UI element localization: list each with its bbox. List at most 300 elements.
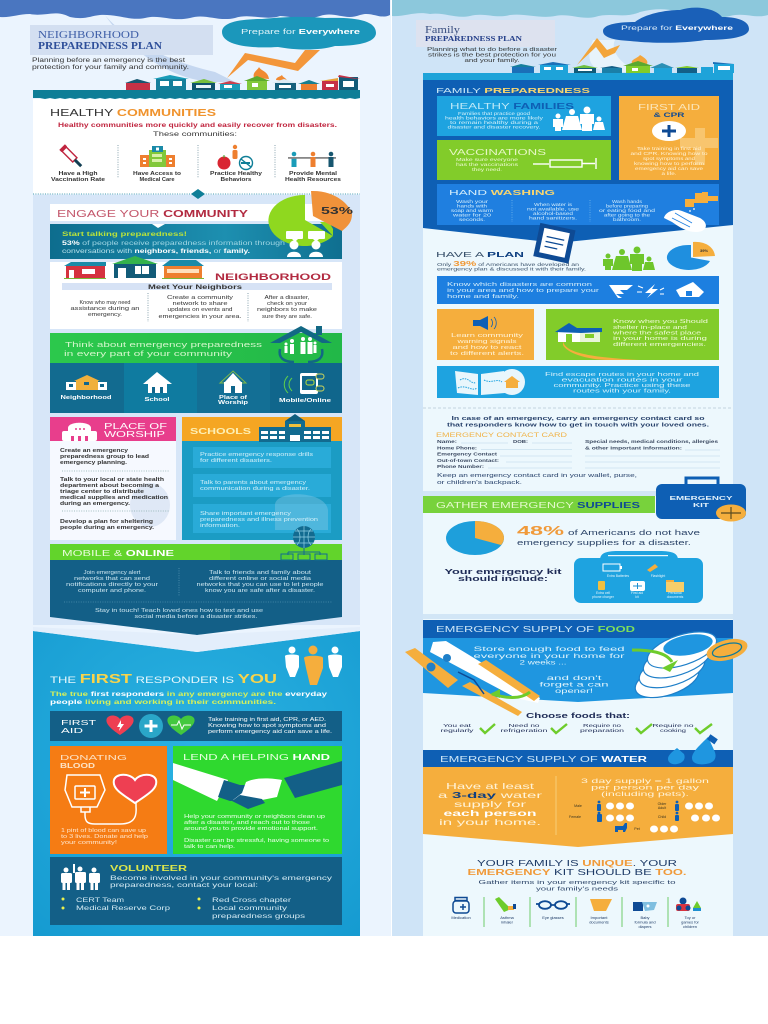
heading: first aid: FIRST	[61, 718, 97, 727]
text: worship tips: emergency planning.	[60, 460, 128, 466]
heading: your family is unique: YOUR FAMILY IS UNIQUE . YOUR	[477, 859, 678, 868]
panel: hand washing: Wash hands	[612, 199, 643, 204]
icon: emergency kit: EMERGENCY	[670, 496, 733, 502]
intro text	[32, 57, 189, 71]
form fields: Home Phone:	[437, 446, 478, 450]
panel: know which disasters: home and family.	[447, 294, 520, 300]
list: volunteer organizations	[62, 897, 305, 920]
panel: gather emergency supplies	[423, 478, 746, 603]
heading: lend a helping hand: LEND A HELPING HAND	[183, 752, 330, 762]
panel: shelter in place: shelter in-place and	[613, 325, 687, 331]
heading: donating blood: BLOOD	[60, 761, 96, 770]
panel: shelter in place	[546, 309, 719, 360]
title: family preparedness plan	[416, 20, 555, 47]
panel: healthy communities	[33, 99, 360, 194]
panel: family preparedness plan background	[392, 0, 768, 936]
text: your emergency kit should include: Your emergency kit	[444, 569, 563, 576]
text: item labels: Toy or	[685, 915, 696, 920]
text: item labels: Medication	[451, 915, 471, 920]
text: helping hand advice: Disaster can be stressful, having someone to	[184, 838, 329, 844]
text: item labels: documents	[589, 920, 609, 924]
icon: school building	[259, 414, 331, 442]
panel: engage your community	[50, 191, 354, 635]
text: volunteer intro: preparedness, contact your local:	[110, 882, 258, 889]
panel: first aid and cpr	[619, 96, 719, 180]
icon: can opener	[405, 641, 540, 716]
chart: water per person: Female	[569, 815, 581, 819]
panel: escape routes	[437, 366, 719, 398]
text: worship tips	[60, 448, 170, 531]
list: food criteria: Require no	[652, 723, 694, 729]
text: store enough food: forget a can	[540, 682, 609, 688]
text: school tips: Talk to parents about emergency	[200, 480, 306, 486]
panel: hand washing: seconds.	[459, 217, 485, 222]
text: icon labels	[51, 171, 341, 183]
panel: hand washing: not available, use	[527, 206, 580, 212]
text: neighbor tips: After a disaster,	[264, 295, 310, 301]
text: one gallon per person: (including pets).	[601, 792, 690, 798]
intro text: protection for your family and community.	[32, 64, 189, 71]
panel: vaccinations	[437, 140, 611, 180]
icon: house and path	[555, 323, 640, 360]
panel: lend a helping hand	[173, 746, 342, 854]
panel: emergency supply of food	[405, 620, 750, 734]
callout: prepare for everywhere cloud	[603, 8, 749, 43]
panel: donating blood	[50, 746, 167, 854]
text: think about emergency preparedness: in every part of your community	[64, 349, 232, 358]
icon: kit contents: Extra cell	[596, 591, 610, 595]
heading: the first responder is you: THE FIRST RESPONDER IS YOU	[50, 672, 277, 686]
text: neighbor tips: assistance during an	[70, 306, 140, 312]
icon: green family	[603, 246, 655, 271]
panel: hand washing: hands with	[457, 204, 488, 208]
text: school tips: information.	[200, 523, 240, 529]
form fields: Phone Number:	[437, 464, 485, 469]
panel: hand washing: bathroom.	[613, 217, 641, 222]
panel: healthy families: health behaviors are more likely	[445, 116, 544, 120]
panel: shelter in place: where the safest place	[613, 330, 701, 336]
icon: volunteers	[61, 864, 100, 890]
panel: warning signals: warning signals	[456, 339, 517, 345]
text: labels	[60, 395, 331, 406]
panel: first aid and cpr: spot symptoms and	[643, 156, 696, 161]
panel: shelter in place: different emergencies.	[613, 342, 706, 348]
icon: place of worship	[220, 371, 246, 393]
panel: shelter in place: in your home is during	[613, 336, 707, 342]
icon: school	[143, 372, 172, 393]
text: 48 percent fact: 48%	[517, 523, 565, 538]
icon: healthy behaviors	[218, 145, 252, 170]
text: helping hand advice	[184, 814, 329, 850]
text: neighbor tips: emergency.	[88, 312, 122, 318]
text: gather items: your family's needs	[536, 886, 618, 892]
text: 48 percent fact	[517, 523, 700, 547]
text: healthy communities summary: Healthy communities more quickly and easily recover from disasters.	[58, 122, 337, 129]
text: store enough food	[474, 646, 626, 695]
text: blood facts: to 3 lives. Donate and help	[61, 834, 148, 840]
form fields: Name:	[437, 439, 458, 444]
text: mobile tips: know you are safe after a disaster.	[205, 588, 315, 594]
text: icon labels: Vaccination Rate	[51, 177, 105, 183]
text: neighbor tips: neighbors to make	[257, 307, 317, 313]
heading: place of worship: WORSHIP	[104, 430, 165, 439]
chart: water per person: Male	[574, 804, 582, 808]
panel: shelter in place: Know when you Should	[613, 319, 708, 325]
icon: toy	[676, 898, 701, 911]
icon: row of houses	[125, 67, 360, 90]
list: food criteria	[440, 723, 712, 734]
text: one gallon per person	[581, 779, 709, 798]
panel: emergency contact card	[436, 416, 720, 486]
icon: kit contents	[574, 551, 703, 603]
icon: emergency kit	[656, 478, 746, 522]
panel: warning signals: Learn community	[451, 333, 524, 339]
icon: eye glasses	[536, 901, 570, 909]
text: one gallon per person: per person per day	[591, 786, 699, 792]
text: labels: Mobile/Online	[279, 398, 331, 404]
text: neighbor tips: Create a community	[167, 295, 234, 301]
panel: hand washing: before preparing	[606, 204, 649, 208]
text: gather items	[478, 880, 676, 892]
panel: first aid and cpr: FIRST AID	[638, 102, 700, 112]
chart: 53% pie: 53%	[321, 205, 354, 217]
list: food criteria: Need no	[508, 723, 540, 729]
text: school tips: for different disasters.	[200, 458, 272, 464]
panel: start talking	[50, 224, 342, 259]
text: labels: Worship	[218, 400, 249, 406]
icon: mobile online	[284, 373, 324, 394]
text: worship tips: Create an emergency	[60, 448, 128, 454]
icon: kit contents: Extra Batteries	[607, 574, 629, 578]
icon: watermark hands	[130, 483, 170, 527]
text: three day water supply: in your home.	[439, 817, 541, 827]
panel: escape routes: evacuation routes in your	[562, 378, 683, 384]
panel: healthy families: Families that practice good	[458, 111, 531, 116]
icon: family	[553, 106, 605, 131]
heading: have a plan: HAVE A PLAN	[436, 250, 524, 259]
panel: family preparedness	[423, 73, 733, 243]
text: choose foods that: Choose foods that:	[526, 711, 630, 720]
form fields: Emergency Contact	[437, 452, 498, 456]
text: 48 percent fact: emergency supplies for a disaster.	[517, 540, 691, 547]
text: mobile tips: computer and phone.	[78, 588, 146, 594]
icon: first aid hearts and plus	[106, 714, 195, 738]
text: three day water supply: Have at least	[446, 781, 535, 791]
text: only 39 percent: emergency plan & discussed it with their family.	[437, 266, 586, 272]
icon: water drops	[668, 734, 718, 764]
panel: emergency supply of water	[423, 734, 733, 847]
text: neighbor tips: Know who may need	[80, 300, 131, 306]
panel: the first responder is you	[33, 627, 360, 936]
panel: hand washing: Wash your	[456, 199, 489, 204]
text: neighbor tips	[70, 295, 317, 320]
list: volunteer organizations: Local community	[212, 905, 288, 912]
intro text: and your family.	[464, 58, 520, 64]
list: food criteria: Require no	[583, 723, 622, 729]
title: neighborhood preparedness plan: NEIGHBORHOOD	[38, 30, 139, 41]
panel: emergency contact card: that responders know how to get in touch with your loved ones.	[447, 422, 710, 428]
text: mobile tips: Join emergency alert	[84, 570, 141, 576]
panel: hand washing: alcohol-based	[533, 211, 574, 216]
form fields: Out-of-town Contact:	[437, 458, 500, 463]
icon: syringe	[59, 144, 84, 169]
text: item labels: formula and	[634, 920, 656, 924]
text: icon labels: Have a High	[58, 171, 98, 177]
icon: speaker	[473, 316, 496, 330]
icon: neighborhood	[66, 375, 107, 390]
intro text: Planning what to do before a disaster	[427, 47, 557, 53]
icon: three people holding hands	[288, 152, 336, 167]
list: volunteer organizations: Medical Reserve Corp	[76, 905, 171, 912]
heading: your family is unique	[468, 859, 686, 877]
panel: hand washing	[437, 184, 719, 232]
chart: water per person	[569, 801, 720, 832]
text: store enough food: everyone in your home for	[474, 653, 626, 660]
heading: place of worship	[104, 422, 167, 439]
panel: first aid and cpr: knowing how to perform	[634, 161, 704, 166]
text: store enough food: Store enough food to feed	[474, 646, 625, 653]
icon: map and home	[455, 369, 525, 395]
icon: row of houses	[510, 55, 734, 73]
panel: first aid and cpr: a life.	[662, 171, 676, 176]
text: first aid training: Take training in first aid, CPR, or AED.	[208, 717, 326, 723]
icon: kit contents: phone charger	[592, 595, 615, 599]
heading: engage your community: ENGAGE YOUR COMMUNITY	[57, 209, 248, 220]
intro text: strikes is the best protection for you	[428, 52, 556, 58]
panel: your family is unique	[451, 859, 701, 929]
panel: hand washing: water for 20	[453, 212, 492, 218]
panel: mobile and online	[50, 526, 342, 635]
text: item labels: Eye glasses	[542, 915, 564, 920]
panel: escape routes: Find escape routes in your home and	[545, 372, 699, 378]
text: labels: Neighborhood	[60, 395, 112, 401]
icon: medication	[453, 898, 469, 913]
text: three day water supply: a 3-day water	[438, 790, 542, 800]
text: first aid training	[208, 717, 332, 735]
text: helping hand advice: Help your community or neighbors clean up	[184, 814, 325, 820]
chart: 53% pie	[268, 191, 354, 246]
heading: volunteer: VOLUNTEER	[110, 864, 187, 873]
text: icon labels: Behaviors	[220, 177, 252, 183]
heading: first aid: AID	[61, 726, 84, 735]
heading: first aid	[61, 718, 97, 735]
text: mobile tips: networks that can send	[74, 576, 150, 582]
text: first aid training: Knowing how to spot symptoms and	[208, 723, 326, 729]
icon: tornado, lightning, house	[609, 282, 704, 298]
text: labels: Place of	[219, 395, 247, 401]
panel: emergency contact card: In case of an emergency, carry an emergency contact card so	[452, 416, 705, 422]
text: mobile tips	[64, 568, 332, 620]
icon: house with family in hands	[270, 326, 332, 362]
chart: water per person: Older	[658, 802, 667, 806]
text: item labels: Asthma	[500, 915, 515, 920]
text: worship tips: people during an emergency.	[60, 525, 155, 531]
icon: plus	[652, 121, 686, 141]
heading: emergency supply of water: EMERGENCY SUPPLY OF WATER	[440, 755, 648, 764]
text: icon labels: Medical Care	[140, 177, 175, 183]
list: volunteer organizations: Red Cross chapter	[212, 897, 291, 904]
list: food criteria: regularly	[440, 728, 475, 734]
icon: handshake	[173, 761, 342, 809]
heading: gather emergency supplies: GATHER EMERGENCY SUPPLIES	[436, 501, 641, 510]
panel: emergency contact card: Keep an emergency contact card in your wallet, purse,	[437, 473, 638, 479]
icon: baby formula and diapers	[633, 902, 657, 911]
panel: start talking: 53% of people receive preparedness information through	[62, 240, 286, 247]
panel: neighborhood	[50, 256, 342, 329]
panel: healthy families: to remain healthy during a	[450, 120, 539, 125]
list: volunteer organizations: CERT Team	[76, 897, 124, 904]
text: item labels: games for	[681, 920, 700, 924]
teal ground strip	[33, 90, 360, 99]
text: one gallon per person: 3 day supply = 1 gallon	[581, 779, 709, 785]
panel: hand washing: HAND WASHING	[449, 188, 555, 197]
panel: warning signals: to different alerts.	[450, 351, 524, 357]
icon: globe network	[281, 526, 327, 560]
panel: vaccinations: they need.	[472, 167, 502, 172]
icon: neighborhood houses	[64, 256, 204, 278]
panel: first aid and cpr: & CPR	[654, 112, 685, 119]
panel: escape routes: routes with your family.	[573, 388, 671, 394]
text: true first responders: people living and working in their communities.	[50, 699, 276, 706]
text: mobile tips: different online or social media	[209, 576, 311, 582]
callout: prepare for everywhere cloud	[222, 17, 376, 50]
panel: volunteer	[50, 857, 342, 925]
intro text: Planning before an emergency is the best	[32, 57, 185, 64]
text: start talking: Start talking preparedness!	[62, 231, 187, 238]
text: helping hand advice: around you to provide emotional support.	[184, 826, 318, 832]
panel: escape routes: community. Practice using these	[554, 383, 691, 389]
list: food criteria: You eat	[443, 723, 472, 729]
panel: warning signals	[437, 309, 534, 360]
text: neighbor tips: network to share	[172, 301, 228, 307]
text: true first responders: The true first responders in any emergency are the everyday	[50, 691, 328, 698]
panel: every part of your community	[50, 326, 342, 413]
panel: warning signals: and how to react	[452, 345, 522, 351]
icon: plan document	[533, 223, 576, 264]
text: worship tips: Talk to your local or state health	[60, 477, 164, 483]
title: neighborhood preparedness plan: PREPAREDNESS PLAN	[38, 41, 163, 52]
text: icon labels: Provide Mental	[289, 171, 338, 177]
text: mobile tips: networks that you can use to let people	[196, 582, 324, 588]
icon: people talking	[286, 231, 325, 257]
icon: lightning bolt	[577, 38, 620, 65]
text: worship tips: during an emergency.	[60, 501, 131, 507]
icon: important documents	[590, 899, 612, 911]
text: these communities: These communities:	[153, 131, 237, 138]
text: neighbor tips: emergencies in your area.	[158, 314, 242, 320]
text: 48 percent fact: of Americans do not have	[568, 530, 700, 537]
icon: tap and washing hands	[664, 192, 718, 232]
panel: neighborhood preparedness plan background	[0, 0, 391, 936]
icon: asthma inhaler	[495, 897, 516, 912]
panel: vaccinations: Make sure everyone	[456, 157, 519, 162]
panel: schools	[182, 414, 342, 540]
text: volunteer intro	[110, 875, 333, 889]
text: gather items: Gather items in your emergency kit specific to	[478, 880, 676, 886]
text: item labels: Important	[591, 915, 608, 920]
list: food criteria: preparation	[580, 728, 625, 734]
callout: prepare for everywhere cloud: Prepare for Everywhere	[621, 25, 734, 32]
chart: water per person: Adult	[658, 806, 666, 810]
text: neighbor tips: sure they are safe.	[262, 314, 312, 320]
text: first aid training: perform emergency aid can save a life.	[208, 729, 332, 735]
chart: 39% pie: 39%	[700, 248, 708, 253]
panel: hand washing: after going to the	[604, 212, 651, 218]
form fields: DOB:	[513, 439, 529, 444]
panel: hand washing: hand sanitizers.	[529, 216, 577, 220]
icon: open can	[631, 625, 750, 704]
heading: meet your neighbors	[62, 283, 332, 291]
text: icon labels: Health Resources	[285, 177, 341, 183]
text: your emergency kit should include	[444, 569, 563, 583]
panel: vaccinations: has the vaccinations	[456, 162, 519, 167]
text: item labels	[451, 915, 700, 929]
panel: emergency contact card: or children's backpack.	[437, 480, 523, 486]
text: school tips: Practice emergency response drills	[200, 452, 313, 458]
panel: know which disasters: Know which disasters are common	[447, 282, 592, 288]
text: store enough food: opener!	[555, 688, 593, 695]
heading: emergency supply of food: EMERGENCY SUPPLY OF FOOD	[436, 625, 636, 634]
panel: know which disasters: in your area and how to prepare your	[447, 288, 599, 294]
heading: family preparedness: FAMILY PREPAREDNESS	[436, 86, 590, 95]
icon: worship building	[62, 423, 97, 441]
panel: first aid and cpr: and CPR. Knowing how to	[630, 151, 708, 156]
icon: kit contents: Flashlight	[651, 574, 665, 578]
text: mobile tips: notifications directly to your	[66, 582, 158, 588]
panel: healthy families: disaster and disaster recovery.	[448, 124, 540, 130]
text: mobile tips: Stay in touch! Teach loved ones how to text and use	[95, 608, 263, 614]
form fields: Special needs, medical conditions, allergies	[585, 439, 719, 444]
text: neighbor tips: updates on events and	[168, 307, 233, 313]
text: true first responders	[50, 691, 328, 706]
chart: 48% pie	[446, 521, 504, 555]
panel: community places	[50, 363, 342, 413]
panel: know which disasters	[437, 276, 719, 304]
text: store enough food: and don't	[546, 675, 602, 682]
callout: prepare for everywhere cloud: Prepare for Everywhere	[241, 27, 360, 36]
text: icon labels: Practice Healthy	[210, 171, 262, 177]
text: helping hand advice: talk to can help.	[184, 844, 235, 850]
icon: kit contents: kit	[635, 595, 639, 599]
text: think about emergency preparedness	[64, 340, 262, 358]
text: school tips: communication during a disaster.	[200, 486, 310, 492]
text: blood facts: your community!	[61, 840, 117, 846]
icon: blood bag and heart	[65, 775, 156, 824]
text: mobile tips: social media before a disaster strikes.	[134, 614, 258, 620]
icon: kit contents: Personal	[668, 591, 682, 595]
divider with diamond	[33, 189, 360, 199]
form fields: & other important information:	[585, 446, 683, 450]
text: item labels: diapers	[638, 924, 652, 929]
heading: donating blood	[60, 753, 127, 770]
text: neighbor tips: check on your	[267, 301, 307, 307]
heading: meet your neighbors: Meet Your Neighbors	[148, 284, 243, 291]
title: family preparedness plan: Family	[425, 25, 461, 36]
list: food criteria: refrigeration	[500, 728, 548, 734]
icon: three responders	[285, 646, 342, 685]
text: labels: School	[144, 397, 170, 403]
heading: neighborhood: NEIGHBORHOOD	[215, 272, 331, 283]
panel: first aid	[50, 711, 342, 741]
heading: schools: SCHOOLS	[190, 426, 251, 436]
panel: first aid and cpr: emergency aid can save	[635, 166, 704, 171]
text: item labels: inhaler	[501, 920, 514, 924]
panel: hand washing: soap and warm	[451, 208, 493, 213]
panel: have a plan	[436, 223, 719, 398]
panel: healthy families	[437, 96, 611, 136]
text: icon labels: Have Access to	[133, 171, 181, 177]
panel: place of worship	[50, 417, 176, 540]
